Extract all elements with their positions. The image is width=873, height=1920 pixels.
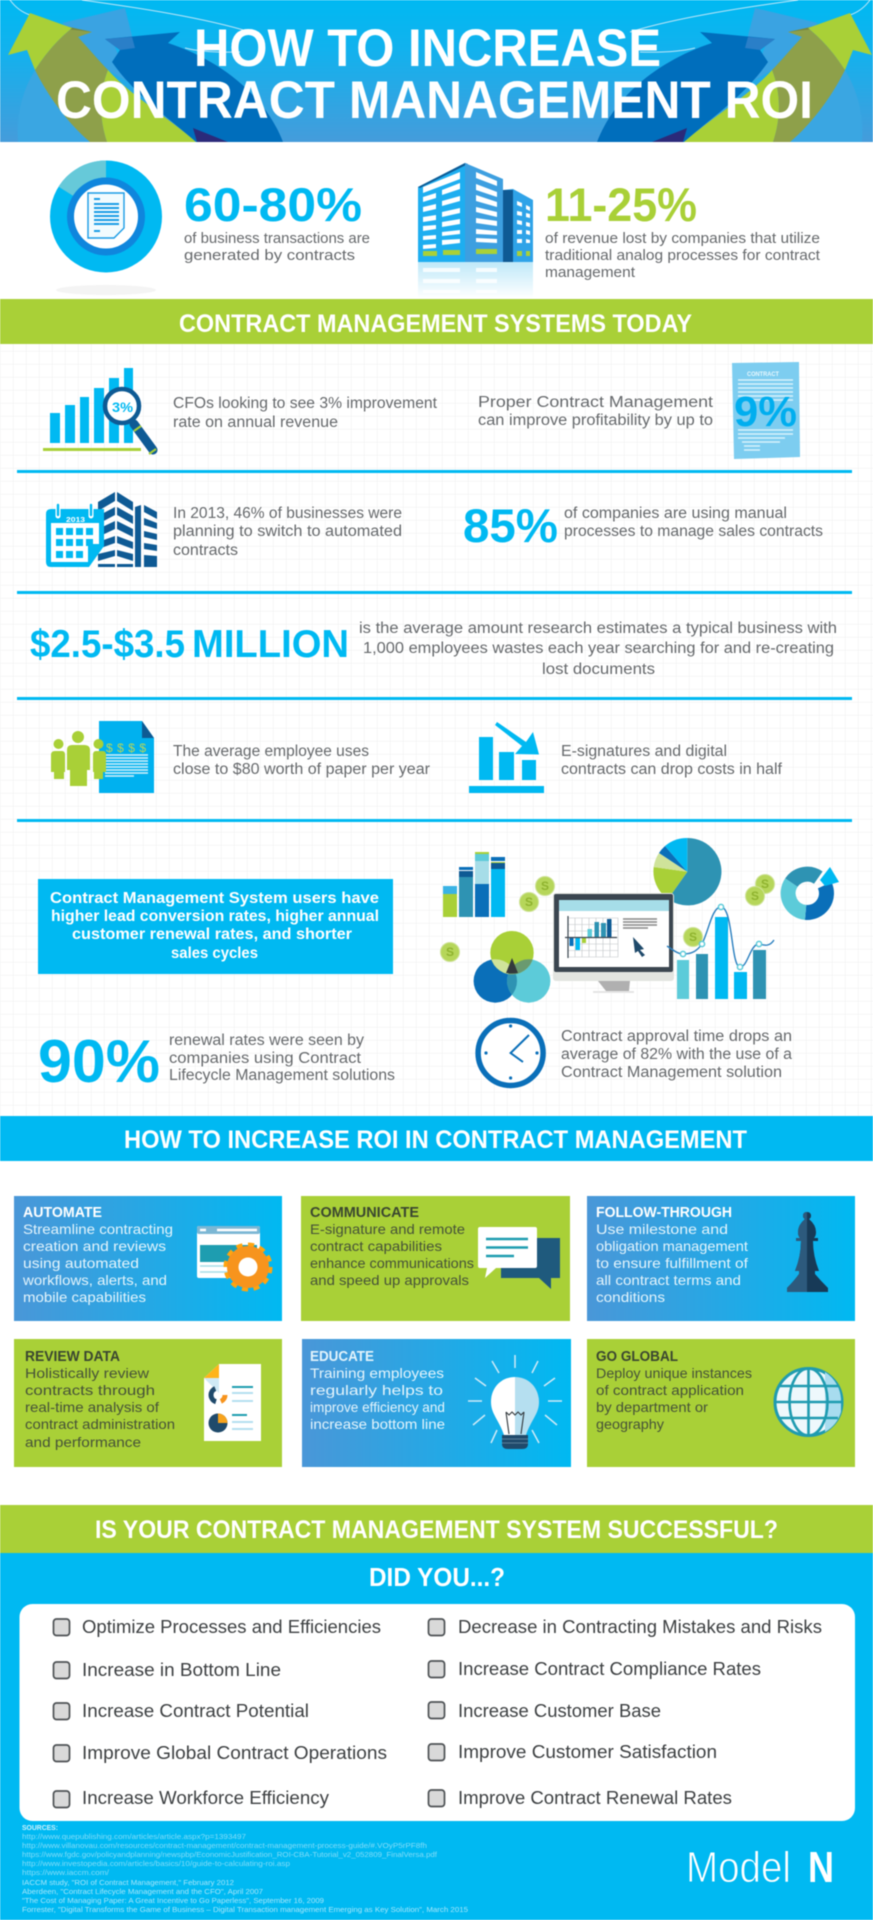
text: average amount: 1,000 employees wastes each year searching for and re-creating — [363, 640, 834, 657]
text: renewal rates: companies using Contract — [169, 1050, 362, 1067]
text: approval time: average of 82% with the use of a — [561, 1046, 792, 1063]
card text: contracts through — [25, 1382, 155, 1398]
text: proper contract management — [478, 394, 714, 429]
card: automate — [14, 1196, 282, 1321]
stacked bars — [443, 852, 505, 917]
card text: AUTOMATE — [23, 1205, 102, 1221]
sources: https://www.iaccm.com/ — [22, 1868, 110, 1877]
sources: Aberdeen, "Contract Lifecycle Management and the CFO", April 2007 — [22, 1887, 263, 1896]
text: average amount: is the average amount research estimates a typical business with — [359, 620, 837, 637]
text: revenue lost — [545, 231, 820, 281]
text: average amount: lost documents — [542, 661, 655, 678]
heading: CONTRACT MANAGEMENT SYSTEMS TODAY — [179, 310, 692, 338]
card text: creation and reviews — [23, 1238, 166, 1254]
icon: office building — [418, 163, 533, 298]
text: renewal rates: Lifecycle Management solutions — [169, 1067, 395, 1084]
stat: 90%: 90% — [38, 1028, 160, 1095]
sources: http://www.quepublishing.com/articles/article.aspx?p=1393497 — [22, 1832, 246, 1841]
text: CFOs — [173, 395, 438, 431]
card: go global — [587, 1339, 855, 1467]
card text: by department or — [596, 1399, 708, 1415]
header arrows left — [8, 0, 283, 142]
card: review data — [14, 1339, 282, 1467]
card text: EDUCATE — [310, 1349, 374, 1365]
icon: bar chart with magnifier — [43, 368, 156, 454]
sources: "The Cost of Managing Paper: A Great Incentive to Go Paperless", September 16, 2009 — [22, 1896, 324, 1905]
card text: real-time analysis of — [25, 1399, 159, 1415]
callout: CMS users: sales cycles — [171, 945, 258, 962]
coins: S — [541, 879, 549, 893]
card text: FOLLOW-THROUGH — [596, 1205, 732, 1221]
coins: S — [761, 877, 769, 891]
panel: how to increase ROI heading — [0, 1116, 873, 1161]
coins: S — [446, 945, 454, 959]
line and bar chart — [667, 904, 774, 999]
sources: Forrester, "Digital Transforms the Game of Business – Digital Transaction management Emerging as Key Solution", March 2015 — [22, 1905, 468, 1914]
coins: S — [525, 895, 533, 909]
text: renewal rates — [169, 1032, 395, 1084]
icon: employees and paper — [51, 721, 154, 793]
text: employee paper: close to $80 worth of paper per year — [173, 761, 430, 778]
text: manual processes: of companies are using manual — [564, 505, 787, 522]
card text — [596, 1349, 752, 1432]
sources — [22, 1823, 468, 1914]
pie chart — [653, 838, 721, 905]
sources: http://www.investopedia.com/articles/basics/10/guide-to-calculating-roi.asp — [22, 1859, 290, 1868]
icon: employees and paper: $$$$ — [106, 741, 146, 755]
stat: 60-80%: 60-80% — [184, 178, 362, 231]
illustration: analytics cluster — [440, 838, 839, 1003]
icon: contract 9%: CONTRACT — [747, 371, 779, 378]
text: revenue lost: traditional analog processes for contract — [545, 248, 820, 264]
panel: is your system successful heading — [0, 1505, 873, 1553]
card text: Deploy unique instances — [596, 1365, 752, 1381]
card text: contract capabilities — [310, 1238, 442, 1254]
text: business transactions: of business transactions are — [184, 231, 370, 247]
text: revenue lost: management — [545, 265, 635, 281]
text: manual processes: processes to manage sales contracts — [564, 523, 823, 540]
panel: header banner — [0, 0, 873, 142]
card text: to ensure fulfillment of — [596, 1255, 748, 1271]
card text: conditions — [596, 1289, 665, 1305]
card text: improve efficiency and — [310, 1399, 445, 1415]
icon: globe — [775, 1368, 842, 1436]
card text: enhance communications — [310, 1255, 474, 1271]
sources: SOURCES: — [22, 1823, 58, 1832]
card text: of contract application — [596, 1382, 744, 1398]
checklist text: Increase Customer Base — [458, 1701, 661, 1721]
icon: calendar and buildings: 2013 — [66, 517, 85, 524]
card text: GO GLOBAL — [596, 1349, 678, 1365]
icon: chat bubbles — [478, 1227, 560, 1289]
icon: browser and gear — [197, 1226, 270, 1289]
text: business transactions — [184, 231, 370, 264]
callout: CMS users: Contract Management System users have — [50, 890, 379, 907]
monitor — [553, 893, 674, 993]
card text: REVIEW DATA — [25, 1349, 120, 1365]
coins: S — [751, 889, 759, 903]
card text: and performance — [25, 1434, 141, 1450]
card text: Holistically review — [25, 1365, 150, 1381]
header arrows right — [597, 0, 872, 142]
checkboxes — [54, 1619, 444, 1808]
title: CONTRACT MANAGEMENT ROI — [56, 71, 813, 130]
coins: S — [689, 930, 697, 944]
card text: workflows, alerts, and — [22, 1272, 167, 1288]
checklist text: Improve Contract Renewal Rates — [458, 1788, 732, 1808]
divider 1 — [17, 470, 852, 473]
text: e-signatures: E-signatures and digital — [561, 743, 727, 760]
divider 3 — [17, 697, 852, 700]
icon: calendar and buildings — [46, 492, 157, 567]
checklist text — [82, 1617, 822, 1808]
text: 2013 businesses — [173, 505, 402, 559]
icon: light bulb — [468, 1355, 562, 1449]
card text: obligation management — [596, 1238, 748, 1254]
heading: IS YOUR CONTRACT MANAGEMENT SYSTEM SUCCESSFUL? — [95, 1516, 778, 1544]
card text: COMMUNICATE — [310, 1205, 419, 1221]
donut chart — [788, 867, 839, 912]
text: approval time: Contract Management solution — [561, 1064, 782, 1081]
icon: clock — [478, 1020, 543, 1086]
stat: 85%: 85% — [463, 499, 558, 552]
coins — [440, 874, 774, 962]
text: employee paper: The average employee uses — [173, 743, 369, 760]
text: business transactions: generated by contracts — [184, 248, 355, 264]
icon: bar chart with magnifier: 3% — [112, 399, 134, 415]
text: e-signatures — [561, 743, 783, 778]
panel: top statistics — [50, 160, 820, 298]
card text: using automated — [23, 1255, 139, 1271]
sources: http://www.villanovau.com/resources/contract-management/contract-management-process-guide/#.VOyP5rPF8fh — [22, 1841, 427, 1850]
text: revenue lost: of revenue lost by companies that utilize — [545, 231, 820, 247]
card text — [596, 1205, 748, 1305]
callout: CMS users — [38, 879, 393, 974]
text: 2013 businesses: contracts — [173, 542, 238, 559]
text: 2013 businesses: In 2013, 46% of businesses were — [173, 505, 402, 522]
card text: Streamline contracting — [23, 1221, 173, 1237]
checklist text: Decrease in Contracting Mistakes and Risks — [458, 1617, 822, 1637]
venn diagram — [474, 931, 550, 1003]
text: average amount — [359, 620, 837, 678]
text: approval time — [561, 1028, 792, 1081]
sources: https://www.fgdc.gov/policyandplanning/newspbp/EconomicJustification_ROI-CBA-Tutorial_v2_052809_FinalVersa.pdf — [22, 1850, 438, 1859]
logo: Model N: Model — [686, 1843, 791, 1892]
icon: contract 9% — [732, 362, 800, 459]
checklist panel — [20, 1604, 855, 1821]
stat: $2.5-$3.5 million: $2.5-$3.5 — [30, 623, 185, 666]
card text: Training employees — [310, 1365, 444, 1381]
checklist text: Increase in Bottom Line — [82, 1660, 281, 1680]
checklist text: Increase Workforce Efficiency — [82, 1788, 329, 1808]
text: approval time: Contract approval time drops an — [561, 1028, 792, 1045]
icon: chess piece — [787, 1212, 828, 1292]
divider 2 — [17, 591, 852, 594]
card text — [22, 1205, 173, 1305]
card text: all contract terms and — [596, 1272, 741, 1288]
checklist text: Optimize Processes and Efficiencies — [82, 1617, 381, 1637]
text: CFOs: CFOs looking to see 3% improvement — [173, 395, 438, 412]
card text — [310, 1205, 474, 1288]
panel: contract management systems today heading — [0, 299, 873, 344]
panel: did you checklist section — [0, 1553, 873, 1920]
card text — [25, 1349, 175, 1450]
card: follow-through — [587, 1196, 855, 1321]
icon: document donut — [50, 160, 162, 295]
checklist text: Increase Contract Compliance Rates — [458, 1659, 761, 1679]
text: proper contract management: can improve profitability by up to — [478, 412, 713, 429]
checklist text: Improve Global Contract Operations — [82, 1743, 387, 1763]
heading: HOW TO INCREASE ROI IN CONTRACT MANAGEMENT — [124, 1126, 747, 1154]
callout: CMS users: higher lead conversion rates, higher annual — [51, 908, 379, 925]
card text: and speed up approvals — [310, 1272, 469, 1288]
text: manual processes — [564, 505, 823, 540]
sources: IACCM study, "ROI of Contract Management," February 2012 — [22, 1878, 234, 1887]
card text: mobile capabilities — [23, 1289, 146, 1305]
heading: did you: DID YOU...? — [369, 1562, 505, 1592]
card text: E-signature and remote — [310, 1221, 465, 1237]
card: educate — [302, 1339, 571, 1467]
card text: Use milestone and — [596, 1221, 728, 1237]
stat: $2.5-$3.5 million — [30, 623, 349, 666]
card: communicate — [301, 1196, 570, 1321]
card text — [310, 1349, 445, 1432]
card text: increase bottom line — [310, 1416, 445, 1432]
logo: Model N: N — [808, 1843, 834, 1892]
checklist text: Increase Contract Potential — [82, 1701, 309, 1721]
stat: 11-25%: 11-25% — [545, 178, 697, 231]
text: proper contract management: Proper Contract Management — [478, 394, 714, 411]
title: HOW TO INCREASE — [194, 19, 661, 78]
icon: report document — [204, 1364, 261, 1441]
callout: CMS users: customer renewal rates, and shorter — [72, 926, 352, 943]
icon: falling cost chart — [469, 722, 544, 793]
divider 4 — [17, 819, 852, 822]
card text: regularly helps to — [310, 1382, 443, 1398]
panel: systems today statistics — [0, 344, 873, 1116]
icon: contract 9%: 9% — [734, 388, 797, 436]
card text: contract administration — [25, 1416, 175, 1432]
title — [56, 19, 813, 130]
checklist text: Improve Customer Satisfaction — [458, 1742, 717, 1762]
stat: $2.5-$3.5 million: MILLION — [192, 623, 349, 666]
text: renewal rates: renewal rates were seen by — [169, 1032, 364, 1049]
text: 2013 businesses: planning to switch to automated — [173, 523, 402, 540]
text: employee paper — [173, 743, 430, 778]
card text: geography — [596, 1416, 664, 1432]
text: e-signatures: contracts can drop costs in half — [561, 761, 783, 778]
text: CFOs: rate on annual revenue — [173, 414, 338, 431]
